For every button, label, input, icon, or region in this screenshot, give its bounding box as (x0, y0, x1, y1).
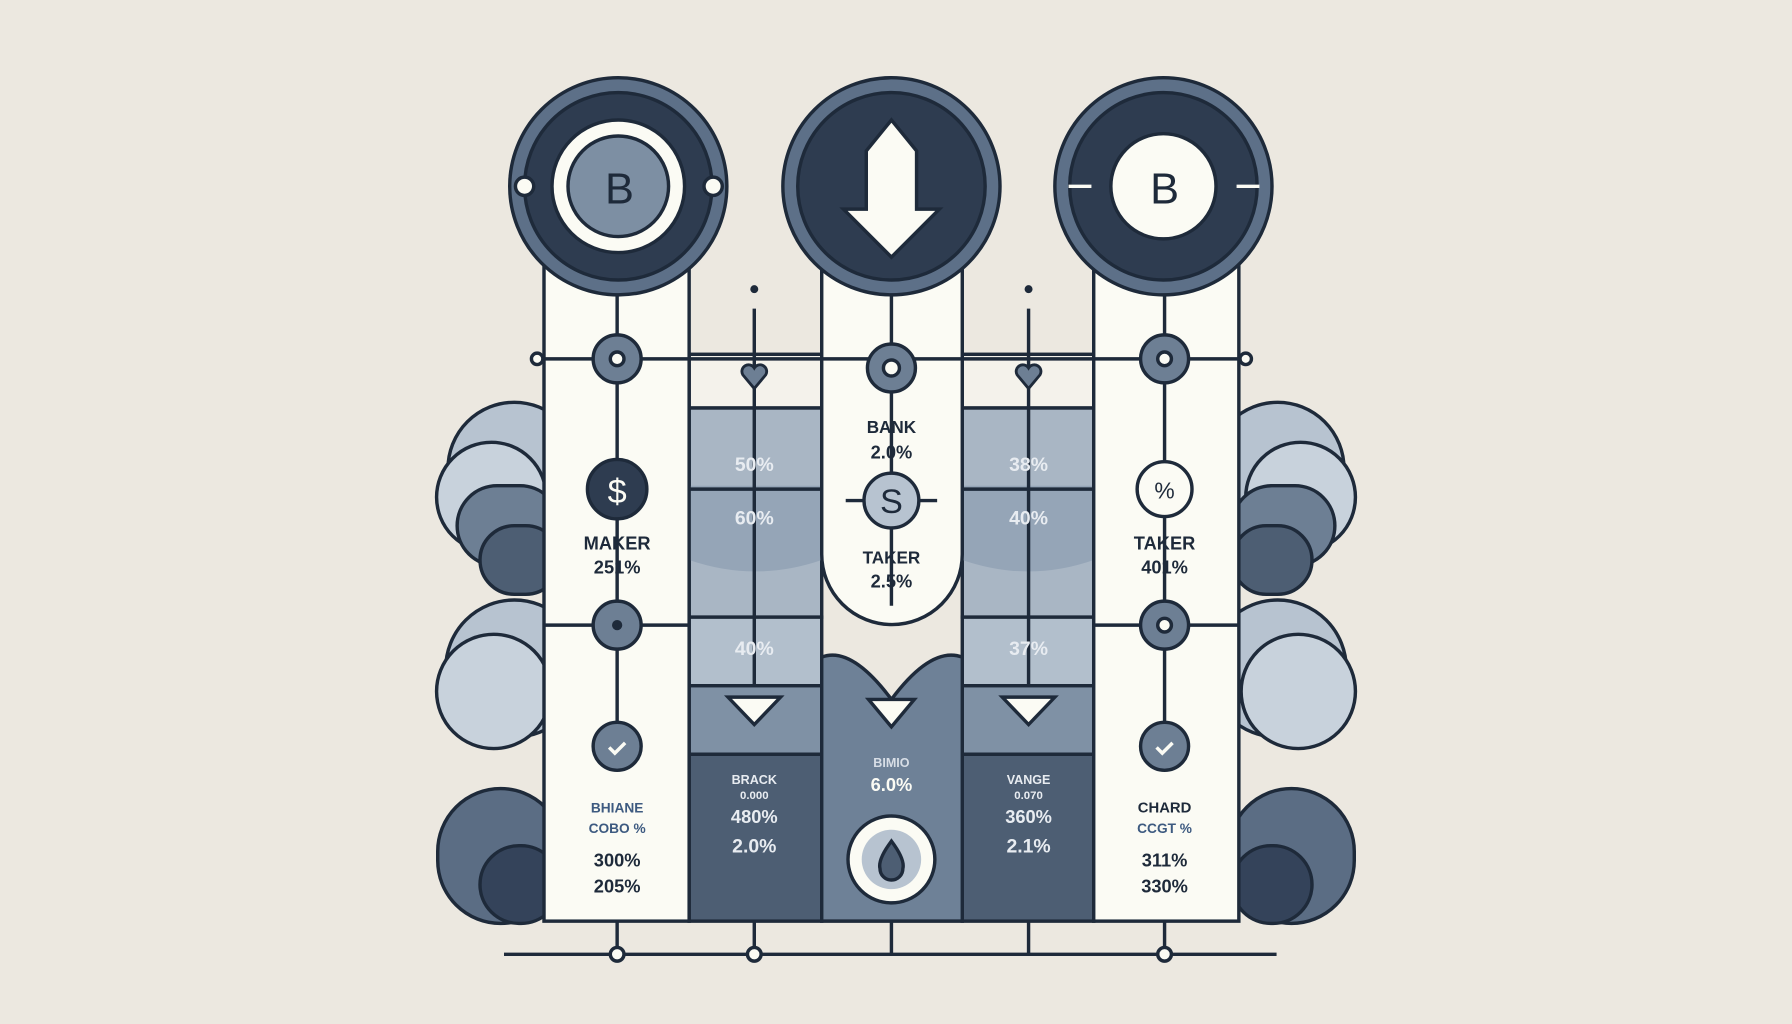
texts gaps: 2.0% (732, 836, 776, 858)
texts gaps: 40% (735, 638, 774, 660)
texts left column: COBO % (589, 821, 646, 836)
texts gaps: 480% (731, 806, 778, 827)
nodes (587, 335, 1192, 770)
texts gaps: 38% (1009, 454, 1048, 476)
center lower panel (822, 655, 962, 921)
texts gaps: 0.000 (740, 790, 769, 802)
texts center: 2.5% (871, 570, 912, 591)
connector lines (531, 286, 1251, 754)
center column (822, 263, 962, 625)
hearts (742, 365, 1041, 389)
texts right column: 311% (1142, 849, 1187, 870)
texts right column (1134, 533, 1195, 897)
texts left column: 300% (594, 849, 641, 870)
texts right column: 401% (1141, 557, 1188, 578)
texts gaps: BRACK (732, 773, 777, 787)
texts gaps: 37% (1009, 638, 1048, 660)
texts gaps: 40% (1009, 508, 1048, 530)
gap panel right (962, 354, 1094, 921)
texts right column: CCGT % (1137, 821, 1192, 836)
texts center (863, 417, 921, 795)
text: % (1154, 477, 1175, 503)
text: S (880, 483, 903, 521)
texts center: BANK (867, 417, 917, 437)
texts left column: 205% (594, 876, 641, 897)
texts gaps: 50% (735, 454, 774, 476)
texts center: BIMIO (873, 756, 910, 770)
right column (1094, 263, 1239, 921)
texts gaps: 0.070 (1014, 790, 1043, 802)
texts left column: BHIANE (591, 801, 643, 816)
top circle left (510, 78, 727, 295)
texts right column: CHARD (1138, 801, 1192, 817)
text: $ (608, 473, 627, 511)
gap panel left (689, 354, 822, 921)
texts left column: 251% (594, 557, 641, 578)
bottom timeline (504, 921, 1277, 961)
top circle center (783, 78, 1000, 295)
texts right column: 330% (1141, 876, 1188, 897)
texts center: 2.0% (871, 441, 912, 462)
texts gaps: 2.1% (1006, 836, 1051, 858)
texts gaps: VANGE (1007, 773, 1050, 787)
side blobs right (1209, 402, 1355, 923)
texts center: 6.0% (871, 774, 912, 795)
texts gaps (731, 454, 1052, 858)
texts left column (584, 533, 651, 897)
texts right column: TAKER (1134, 533, 1195, 554)
top circle right: B (1150, 165, 1179, 213)
texts gaps: 60% (735, 508, 774, 530)
texts gaps: 360% (1005, 806, 1052, 827)
texts left column: MAKER (584, 533, 651, 554)
texts center: TAKER (863, 547, 921, 567)
side blobs left (437, 402, 583, 923)
left column (544, 263, 689, 921)
top circle left: B (605, 165, 634, 213)
top circle right (1055, 78, 1272, 295)
